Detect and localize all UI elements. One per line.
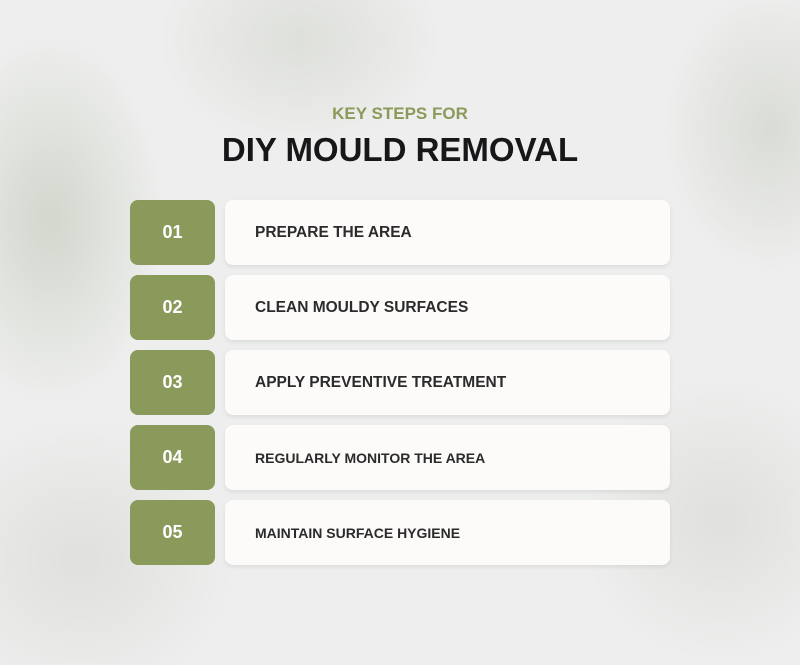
step 05 [130,500,670,568]
label: apply preventive treatment: APPLY PREVENTIVE TREATMENT [255,374,506,390]
number badge 01 [130,200,215,265]
number badge 05: 05 [162,522,183,542]
label: regularly monitor the area: REGULARLY MONITOR THE AREA [255,450,485,466]
step 01 [130,200,670,268]
label: clean mouldy surfaces: CLEAN MOULDY SURFACES [255,298,468,316]
number badge 03: 03 [162,372,183,392]
label: apply preventive treatment [225,350,670,415]
step 03 [130,350,670,418]
subtitle: KEY STEPS FOR [332,104,468,123]
label: maintain surface hygiene: MAINTAIN SURFACE HYGIENE [255,524,460,540]
number badge 01: 01 [162,222,183,242]
label: regularly monitor the area [225,425,670,490]
number badge 02 [130,275,215,340]
number badge 02: 02 [162,297,183,317]
label: clean mouldy surfaces [225,275,670,340]
step 04 [130,425,670,492]
number badge 05 [130,500,215,565]
label: maintain surface hygiene [225,500,670,565]
number badge 04: 04 [162,447,183,467]
label: prepare the area: PREPARE THE AREA [255,224,412,240]
label: prepare the area [225,200,670,265]
title: DIY MOULD REMOVAL [222,131,578,168]
number badge 03 [130,350,215,415]
number badge 04 [130,425,215,490]
step 02 [130,275,670,342]
